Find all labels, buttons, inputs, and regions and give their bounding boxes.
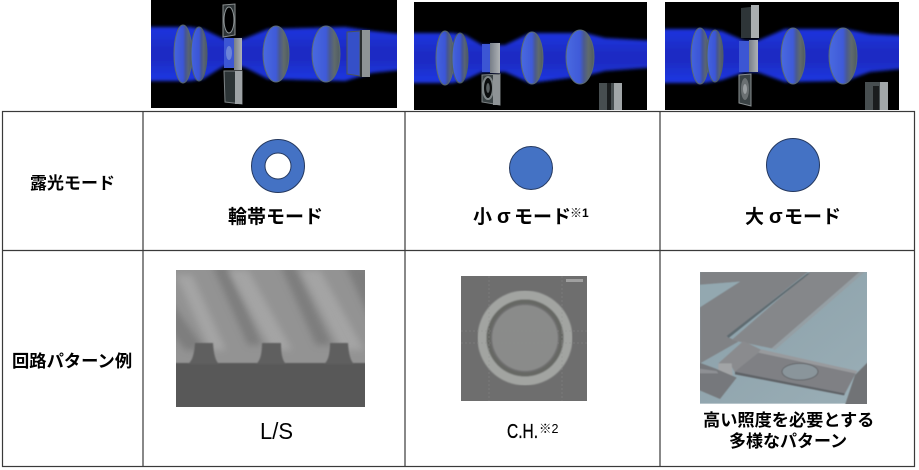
label: small sigma mode: 小 (473, 206, 492, 228)
icon: large sigma pupil (766, 138, 820, 192)
icon: annular mode pupil (252, 140, 304, 192)
label: large sigma mode (745, 206, 841, 228)
icon: small sigma pupil (510, 146, 552, 190)
caption: patterns requiring high illuminance: 多様なパターン (729, 431, 847, 451)
mask stage (599, 83, 622, 110)
light beam (400, 33, 660, 83)
mask stage (347, 30, 370, 77)
caption: patterns requiring high illuminance: 高い照度を必要とする (703, 410, 874, 430)
caption: L/S: L/S (260, 418, 293, 444)
relay lenses (521, 30, 594, 84)
label: large sigma mode: σ (769, 206, 783, 228)
mask stage (865, 82, 888, 110)
light beam (650, 29, 912, 83)
label: large sigma mode: モード (784, 207, 841, 228)
row heading: circuit pattern examples: 回路パターン例 (12, 351, 132, 371)
aperture wheel (223, 4, 242, 104)
relay lenses (781, 28, 857, 84)
label: small sigma mode: ※1 (570, 206, 589, 220)
relay lenses (263, 26, 340, 82)
label: large sigma mode: 大 (745, 206, 764, 228)
optical image: small sigma mode (414, 2, 647, 110)
lens pair (174, 25, 207, 83)
SEM image: line and space (176, 270, 365, 407)
caption: patterns requiring high illuminance (703, 410, 874, 451)
optical image: annular mode (140, 0, 410, 108)
caption: C.H. note 2: ※2 (539, 422, 559, 436)
row heading: exposure mode: 露光モード (30, 174, 115, 193)
optical image: large sigma mode (665, 2, 899, 110)
aperture wheel (482, 43, 500, 105)
SEM image: contact hole (461, 276, 587, 401)
comparison table grid (2, 112, 914, 466)
illustration: diverse pattern (697, 270, 870, 405)
label: small sigma mode: σ (497, 206, 511, 228)
caption: C.H. note 2: C.H. (507, 421, 538, 443)
aperture wheel (739, 5, 759, 106)
light beam (140, 27, 410, 81)
lens pair (436, 31, 468, 85)
label: annular mode: 輪帯モード (228, 206, 323, 228)
label: small sigma mode (473, 206, 589, 228)
lens pair (691, 28, 723, 84)
label: small sigma mode: モード (514, 207, 571, 228)
